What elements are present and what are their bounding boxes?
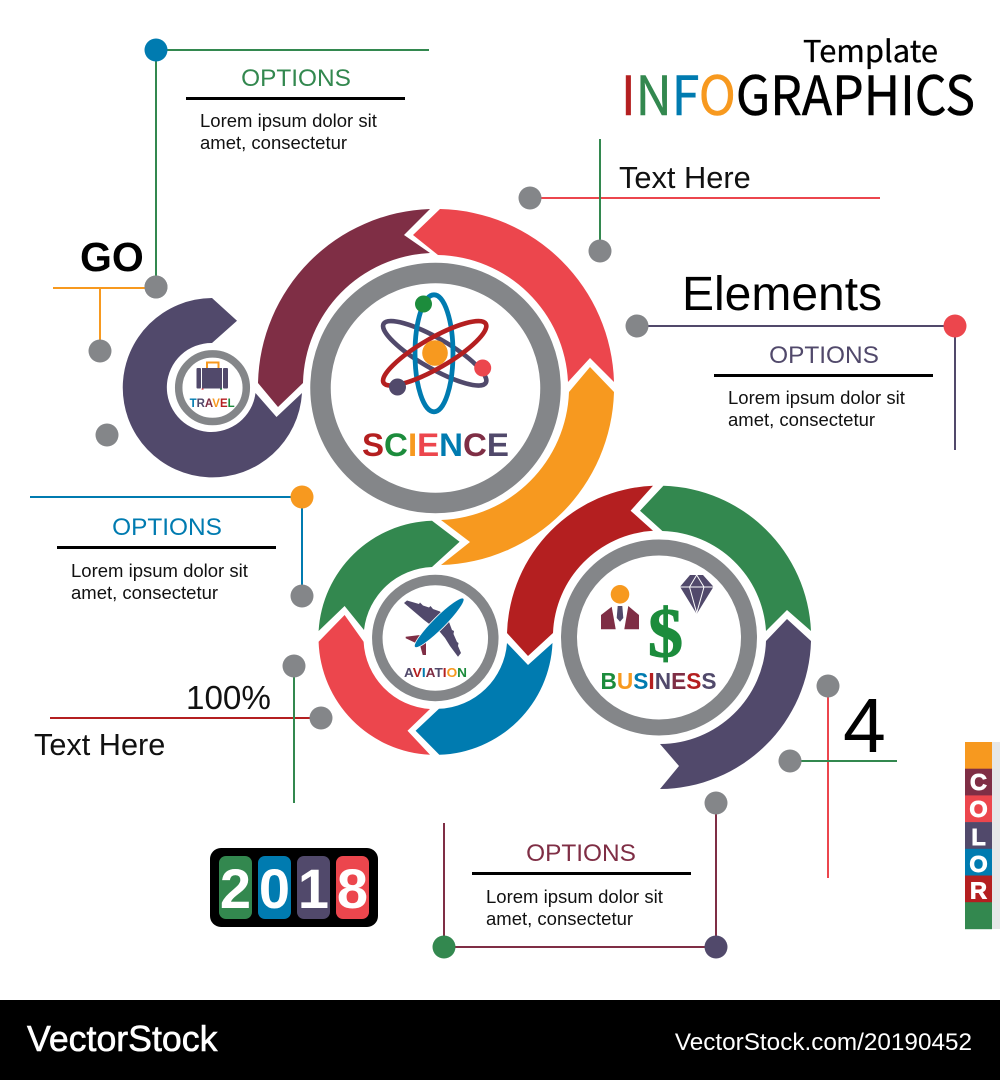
text: aviation: AVIATION (404, 665, 467, 680)
title: INFOGRAPHICS (621, 52, 975, 131)
callout: 100% text here: 100% (186, 680, 271, 717)
color strip: O (969, 796, 988, 822)
callout: bottom options: amet, consectetur (486, 908, 633, 929)
arrow: aviation green (319, 521, 460, 631)
callout: top left options: amet, consectetur (200, 132, 347, 153)
callout: left options: OPTIONS (112, 514, 222, 541)
footer bar (0, 1000, 1000, 1080)
callout: GO (53, 234, 168, 446)
arrow: business purple (660, 619, 811, 789)
badge: 2018: 0 (259, 857, 290, 920)
arrow: science orange (441, 367, 614, 565)
callout: elements options: Lorem ipsum dolor sit (728, 387, 905, 408)
callout: top left options (144, 38, 429, 298)
ring: science (320, 273, 550, 503)
panel: science circle (258, 209, 614, 565)
arrow: business green (640, 486, 811, 631)
panel: business circle (507, 486, 811, 789)
callout: top left options: Lorem ipsum dolor sit (200, 110, 377, 131)
callout: elements options: OPTIONS (769, 342, 879, 369)
text: travel: TRAVEL (190, 396, 235, 410)
callout: bottom options: OPTIONS (526, 840, 636, 867)
color strip: C (970, 769, 987, 795)
arrow: aviation red (319, 615, 430, 755)
icon: businessman (601, 585, 639, 629)
callout: left options: amet, consectetur (71, 582, 218, 603)
ring: aviation (377, 580, 493, 696)
color strip: R (970, 878, 987, 904)
callout: left options (30, 486, 314, 608)
callout: elements options (626, 268, 966, 450)
callout: bottom options: Lorem ipsum dolor sit (486, 886, 663, 907)
ring: business (569, 548, 749, 728)
icon: diamond (680, 575, 714, 614)
callout: top text here: Text Here (619, 160, 751, 195)
icon: atom (376, 295, 493, 412)
badge: 2018 (210, 848, 378, 927)
callout: bottom options (432, 792, 728, 958)
callout: left options: Lorem ipsum dolor sit (71, 560, 248, 581)
callout: top left options: OPTIONS (241, 65, 351, 92)
callout: GO: GO (80, 234, 144, 280)
badge: 2018: 1 (298, 857, 329, 920)
icon: dollar: $ (648, 596, 683, 673)
icon: suitcase (196, 362, 228, 390)
badge: 2018: 8 (337, 857, 368, 920)
callout: 100% text here: Text Here (34, 727, 165, 762)
callout: number 4: 4 (843, 683, 886, 769)
color strip: L (971, 824, 986, 850)
footer bar: VectorStock (27, 1019, 218, 1059)
arrow: science red (413, 209, 614, 382)
arrow: aviation blue (416, 643, 552, 755)
arrow: travel purple (123, 298, 302, 477)
ring: travel (179, 354, 246, 422)
title: Template (803, 27, 938, 71)
arrow: science maroon (258, 209, 430, 407)
callout: number 4 (778, 674, 897, 878)
color strip (965, 742, 1000, 929)
callout: top text here (518, 139, 880, 262)
callout: elements options: Elements (682, 268, 882, 321)
panel: travel circle (123, 298, 302, 477)
badge: 2018: 2 (220, 857, 251, 920)
footer bar: VectorStock.com/20190452 (675, 1029, 972, 1056)
callout: 100% text here (34, 654, 332, 803)
text: business: BUSINESS (600, 668, 716, 694)
color strip: O (969, 851, 988, 877)
icon: airplane (404, 594, 468, 657)
text: science: SCIENCE (362, 427, 509, 463)
callout: elements options: amet, consectetur (728, 409, 875, 430)
panel: aviation circle (319, 521, 552, 755)
arrow: business dark red (507, 486, 653, 656)
